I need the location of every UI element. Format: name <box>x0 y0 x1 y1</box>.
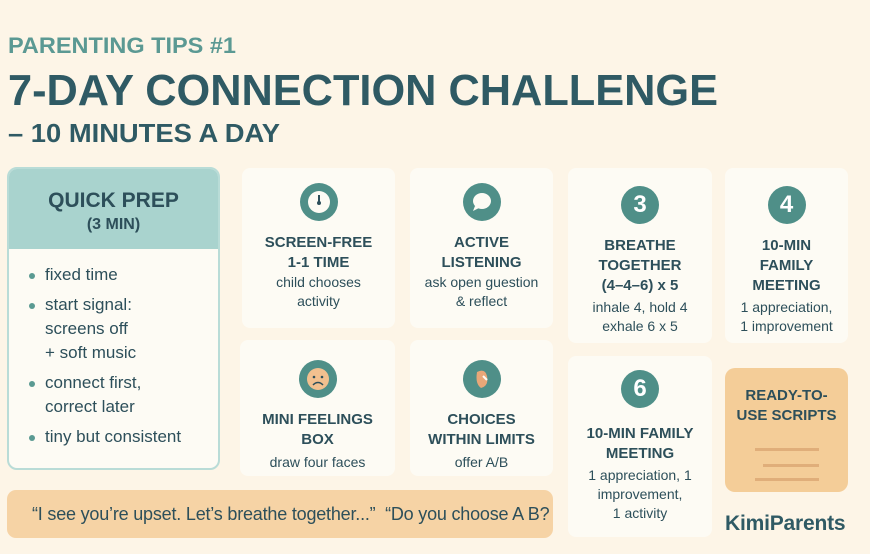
card: day 4 family meeting: MEETING <box>752 277 821 294</box>
panel: quick prep <box>7 167 220 470</box>
card: day 3 breathe together: TOGETHER <box>598 257 682 274</box>
quick prep heading: QUICK PREP <box>48 189 179 212</box>
card: day 4 family meeting: 10-MIN <box>762 237 811 254</box>
card: active listening <box>410 168 553 328</box>
icon: number 4: 4 <box>780 191 793 218</box>
kicker: parenting tips: PARENTING TIPS #1 <box>8 33 236 58</box>
icon: number 4 <box>768 186 806 224</box>
prep bullet list: connect first, <box>45 373 141 392</box>
card: day 6 family meeting: improvement, <box>598 486 682 502</box>
callout: ready-to-use scripts: READY-TO- <box>745 387 828 404</box>
card: day 6 family meeting: 10-MIN FAMILY <box>587 425 693 442</box>
prep bullet list: correct later <box>45 397 135 416</box>
header titles <box>8 33 718 148</box>
card: mini feelings box: draw four faces <box>270 454 365 470</box>
card: day 4 family meeting <box>725 168 848 343</box>
icon: number 6: 6 <box>633 375 647 402</box>
callout: ready-to-use scripts: USE SCRIPTS <box>736 407 837 424</box>
prep bullet list: screens off <box>45 319 128 338</box>
card: screen-free 1-1 time <box>242 168 395 328</box>
card: mini feelings box: BOX <box>301 431 334 448</box>
prep bullet list: start signal: <box>45 295 132 314</box>
quote bar <box>7 490 553 538</box>
prep bullet list: + soft music <box>45 343 136 362</box>
card: choices within limits: CHOICES <box>447 411 516 428</box>
card: choices within limits <box>410 340 553 476</box>
card: active listening: ask open guestion <box>425 274 538 290</box>
card: screen-free 1-1 time: child chooses <box>276 274 361 290</box>
card: screen-free 1-1 time: SCREEN-FREE <box>265 234 372 251</box>
prep bullet list <box>29 265 181 446</box>
prep bullet list: fixed time <box>45 265 118 284</box>
card: day 3 breathe together: exhale 6 x 5 <box>602 318 678 334</box>
card: mini feelings box: MINI FEELINGS <box>262 411 373 428</box>
brand logo: KimiParents <box>725 512 845 535</box>
icon: timer <box>300 183 338 221</box>
prep bullet list: tiny but consistent <box>45 427 181 446</box>
quote bar: “I see you’re upset. Let’s breathe together...” “Do you choose A B? <box>32 504 549 524</box>
subtitle: – 10 MINUTES A DAY <box>8 118 280 148</box>
card: day 3 breathe together <box>568 168 712 343</box>
card: day 4 family meeting: 1 improvement <box>740 318 833 334</box>
main title: 7-DAY CONNECTION CHALLENGE <box>8 66 718 115</box>
icon: number 6 <box>621 370 659 408</box>
card: mini feelings box <box>240 340 395 476</box>
card: day 3 breathe together: BREATHE <box>604 237 676 254</box>
card: day 3 breathe together: (4–4–6) x 5 <box>602 277 678 294</box>
card: day 4 family meeting: FAMILY <box>760 257 813 274</box>
card: screen-free 1-1 time: activity <box>297 293 340 309</box>
quick prep heading <box>9 169 218 249</box>
card: day 3 breathe together: inhale 4, hold 4 <box>593 299 687 315</box>
card: day 6 family meeting: MEETING <box>606 445 674 462</box>
callout: ready-to-use scripts <box>725 368 848 492</box>
icon: number 3: 3 <box>633 191 647 218</box>
icon: hand <box>462 360 500 398</box>
card: screen-free 1-1 time: 1-1 TIME <box>288 254 349 271</box>
icon: number 3 <box>621 186 659 224</box>
card: day 6 family meeting: 1 appreciation, 1 <box>588 467 692 483</box>
icon: speech bubble <box>462 183 500 221</box>
card: day 6 family meeting: 1 activity <box>613 505 667 521</box>
card: choices within limits: offer A/B <box>455 454 508 470</box>
quick prep heading: (3 MIN) <box>87 216 140 233</box>
card: choices within limits: WITHIN LIMITS <box>428 431 535 448</box>
card: active listening: & reflect <box>456 293 507 309</box>
icon: sad face <box>298 360 336 398</box>
card: day 6 family meeting <box>568 356 712 537</box>
card: day 4 family meeting: 1 appreciation, <box>741 299 832 315</box>
card: active listening: ACTIVE <box>454 234 509 251</box>
card: active listening: LISTENING <box>441 254 522 271</box>
